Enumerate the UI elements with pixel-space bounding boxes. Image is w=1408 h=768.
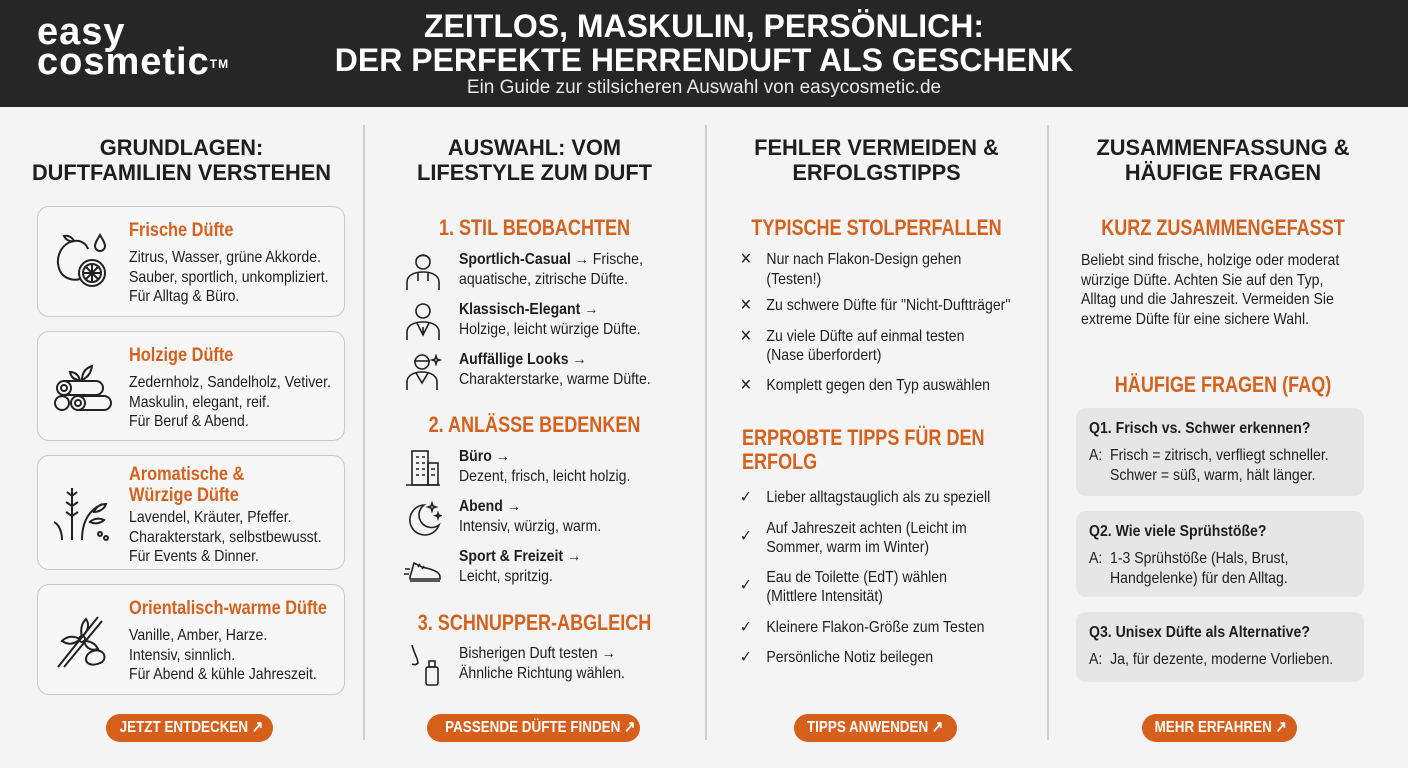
card: frische: Zitrus, Wasser, grüne Akkorde. xyxy=(129,249,321,266)
panel: auswahl: Sportlich-Casual → Frische, xyxy=(459,251,643,268)
card: holzige: Holzige Düfte xyxy=(129,345,233,366)
logo xyxy=(37,11,229,83)
heading col4 xyxy=(1096,135,1350,185)
faq 2: 1-3 Sprühstöße (Hals, Brust, xyxy=(1110,550,1288,567)
faq 1: Frisch = zitrisch, verfliegt schneller. xyxy=(1110,447,1329,464)
card: holzige: Maskulin, elegant, reif. xyxy=(129,394,270,410)
panel: fehler xyxy=(740,135,1010,742)
heading col1: DUFTFAMILIEN VERSTEHEN xyxy=(32,160,331,185)
panel: auswahl: Holzige, leicht würzige Düfte. xyxy=(459,320,641,338)
card: frische: Sauber, sportlich, unkompliziert. xyxy=(129,268,329,286)
button col4: MEHR ERFAHREN ↗ xyxy=(1155,719,1287,736)
card: orientalisch xyxy=(37,584,345,695)
panel: auswahl: Leicht, spritzig. xyxy=(459,568,553,584)
faq 3: Q3. Unisex Düfte als Alternative? xyxy=(1089,624,1310,641)
card: aromatische xyxy=(37,455,345,570)
faq 2: Handgelenke) für den Alltag. xyxy=(1110,570,1288,586)
panel: auswahl: Abend → xyxy=(459,498,521,515)
icon: lemon xyxy=(56,233,106,287)
list: tipps: ✓ xyxy=(740,649,752,666)
list: fehler: Zu schwere Düfte für "Nicht-Duftträger" xyxy=(766,297,1010,314)
card: aromatische: Aromatische & xyxy=(129,464,244,485)
button col4 xyxy=(1142,714,1297,742)
panel: auswahl: Intensiv, würzig, warm. xyxy=(459,518,601,534)
logo: cosmeticTM xyxy=(37,41,229,83)
list: tipps: ✓ xyxy=(740,576,752,594)
list: fehler: ✕ xyxy=(740,297,752,314)
icon: moon xyxy=(409,500,442,536)
card: holzige xyxy=(37,331,345,441)
icon: office xyxy=(406,450,440,486)
list: tipps: Kleinere Flakon-Größe zum Testen xyxy=(766,618,984,636)
subheading tipps xyxy=(742,425,985,474)
summary text: Beliebt sind frische, holzige oder moderat xyxy=(1081,252,1339,269)
list: tipps: Sommer, warm im Winter) xyxy=(766,539,929,556)
faq 2: A: xyxy=(1089,550,1102,567)
summary text: Alltag und die Jahreszeit. Vermeiden Sie xyxy=(1081,291,1334,308)
card: aromatische: Charakterstark, selbstbewusst. xyxy=(129,528,322,546)
list: tipps: Eau de Toilette (EdT) wählen xyxy=(766,568,947,586)
list: fehler: ✕ xyxy=(740,376,752,394)
list: tipps: Auf Jahreszeit achten (Leicht im xyxy=(766,520,967,536)
heading col1 xyxy=(32,135,331,185)
card: aromatische: Lavendel, Kräuter, Pfeffer. xyxy=(129,509,292,526)
heading col2: AUSWAHL: VOM xyxy=(448,135,621,160)
button col3 xyxy=(794,714,957,742)
panel: auswahl: Dezent, frisch, leicht holzig. xyxy=(459,468,630,484)
panel: auswahl xyxy=(404,135,652,742)
card: holzige: Zedernholz, Sandelholz, Vetiver. xyxy=(129,374,331,391)
icon: nose and bottle xyxy=(411,644,439,686)
list: fehler: (Testen!) xyxy=(766,270,821,288)
card: orientalisch: Orientalisch-warme Düfte xyxy=(129,598,327,619)
icon: elegant person xyxy=(406,303,440,340)
subheading tipps: ERFOLG xyxy=(742,449,817,474)
list: fehler xyxy=(740,251,1010,394)
panel: auswahl: Sport & Freizeit → xyxy=(459,548,581,565)
subtitle: Ein Guide zur stilsicheren Auswahl von easycosmetic.de xyxy=(467,77,941,98)
panel: auswahl: Charakterstarke, warme Düfte. xyxy=(459,370,651,388)
icon: casual person xyxy=(406,254,440,290)
subheading schnupper: 3. SCHNUPPER-ABGLEICH xyxy=(418,610,651,635)
faq 1: Schwer = süß, warm, hält länger. xyxy=(1110,466,1315,484)
faq 1 xyxy=(1076,408,1364,496)
icon: vanilla xyxy=(57,616,106,668)
summary text: extreme Düfte für eine sichere Wahl. xyxy=(1081,310,1309,328)
panel: auswahl: Büro → xyxy=(459,448,510,465)
card: aromatische: Für Events & Dinner. xyxy=(129,548,259,565)
card: holzige: Für Beruf & Abend. xyxy=(129,413,249,430)
panel: auswahl: Auffällige Looks → xyxy=(459,351,587,368)
heading col2: LIFESTYLE ZUM DUFT xyxy=(417,160,652,185)
subheading stil: 1. STIL BEOBACHTEN xyxy=(439,215,630,240)
panel: zusammenfassung xyxy=(1081,135,1350,397)
card: orientalisch: Intensiv, sinnlich. xyxy=(129,646,235,664)
summary text xyxy=(1081,252,1340,328)
faq 3: A: Ja, für dezente, moderne Vorlieben. xyxy=(1089,651,1333,668)
faq 1: A: xyxy=(1089,447,1102,464)
heading col4: ZUSAMMENFASSUNG & xyxy=(1096,135,1350,160)
title: ZEITLOS, MASKULIN, PERSÖNLICH: xyxy=(424,8,984,44)
list: fehler: ✕ xyxy=(740,251,752,268)
title: DER PERFEKTE HERRENDUFT ALS GESCHENK xyxy=(335,42,1073,78)
subheading anlaesse: 2. ANLÄSSE BEDENKEN xyxy=(429,412,640,437)
card: frische: Für Alltag & Büro. xyxy=(129,288,239,305)
heading col4: HÄUFIGE FRAGEN xyxy=(1125,160,1321,185)
faq 3 xyxy=(1076,612,1364,682)
panel: duftfamilien xyxy=(32,135,345,742)
list: tipps: ✓ xyxy=(740,528,752,544)
icon: sneaker xyxy=(404,562,441,582)
button col1 xyxy=(106,714,273,742)
title xyxy=(335,8,1073,78)
list: fehler: (Nase überfordert) xyxy=(766,347,881,364)
list: fehler: Nur nach Flakon-Design gehen xyxy=(766,251,961,268)
panel: auswahl: aquatische, zitrische Düfte. xyxy=(459,270,628,288)
card: aromatische: Würzige Düfte xyxy=(129,485,239,506)
list: fehler: ✕ xyxy=(740,328,752,344)
subheading faq: HÄUFIGE FRAGEN (FAQ) xyxy=(1115,372,1331,397)
logo: easy xyxy=(37,11,126,53)
heading col2 xyxy=(417,135,652,185)
faq 1: Q1. Frisch vs. Schwer erkennen? xyxy=(1089,420,1310,437)
panel: auswahl: Ähnliche Richtung wählen. xyxy=(459,664,625,682)
panel: auswahl: Bisherigen Duft testen → xyxy=(459,645,616,662)
icon: logs xyxy=(54,364,112,411)
list: tipps: ✓ xyxy=(740,489,752,506)
list: tipps xyxy=(740,489,990,666)
subheading kurz: KURZ ZUSAMMENGEFASST xyxy=(1101,215,1345,240)
panel: auswahl: Klassisch-Elegant → xyxy=(459,301,598,318)
icon: herbs xyxy=(54,488,109,541)
card: frische xyxy=(37,206,345,317)
faq 2 xyxy=(1076,511,1364,597)
subheading tipps: ERPROBTE TIPPS FÜR DEN xyxy=(742,425,985,450)
summary text: würzige Düfte. Achten Sie auf den Typ, xyxy=(1081,272,1323,288)
card: orientalisch: Für Abend & kühle Jahreszeit. xyxy=(129,666,317,683)
heading col3: ERFOLGSTIPPS xyxy=(792,160,961,185)
button col1: JETZT ENTDECKEN ↗ xyxy=(120,719,263,736)
list: fehler: Zu viele Düfte auf einmal testen xyxy=(766,328,964,344)
subheading stolperfallen: TYPISCHE STOLPERFALLEN xyxy=(751,215,1002,240)
icon: flashy person xyxy=(406,354,442,390)
button col2: PASSENDE DÜFTE FINDEN ↗ xyxy=(445,719,635,736)
card: orientalisch: Vanille, Amber, Harze. xyxy=(129,627,267,644)
list: tipps: Lieber alltagstauglich als zu speziell xyxy=(766,489,990,506)
list: tipps: (Mittlere Intensität) xyxy=(766,588,883,605)
list: tipps: Persönliche Notiz beilegen xyxy=(766,649,933,666)
heading col1: GRUNDLAGEN: xyxy=(100,135,263,160)
header bar xyxy=(0,0,1408,107)
list: tipps: ✓ xyxy=(740,618,752,636)
heading col3 xyxy=(754,135,999,185)
button col3: TIPPS ANWENDEN ↗ xyxy=(807,719,944,736)
list: fehler: Komplett gegen den Typ auswählen xyxy=(766,376,990,394)
button col2 xyxy=(427,714,640,742)
card: frische: Frische Düfte xyxy=(129,220,233,241)
heading col3: FEHLER VERMEIDEN & xyxy=(754,135,999,160)
faq 2: Q2. Wie viele Sprühstöße? xyxy=(1089,523,1266,540)
